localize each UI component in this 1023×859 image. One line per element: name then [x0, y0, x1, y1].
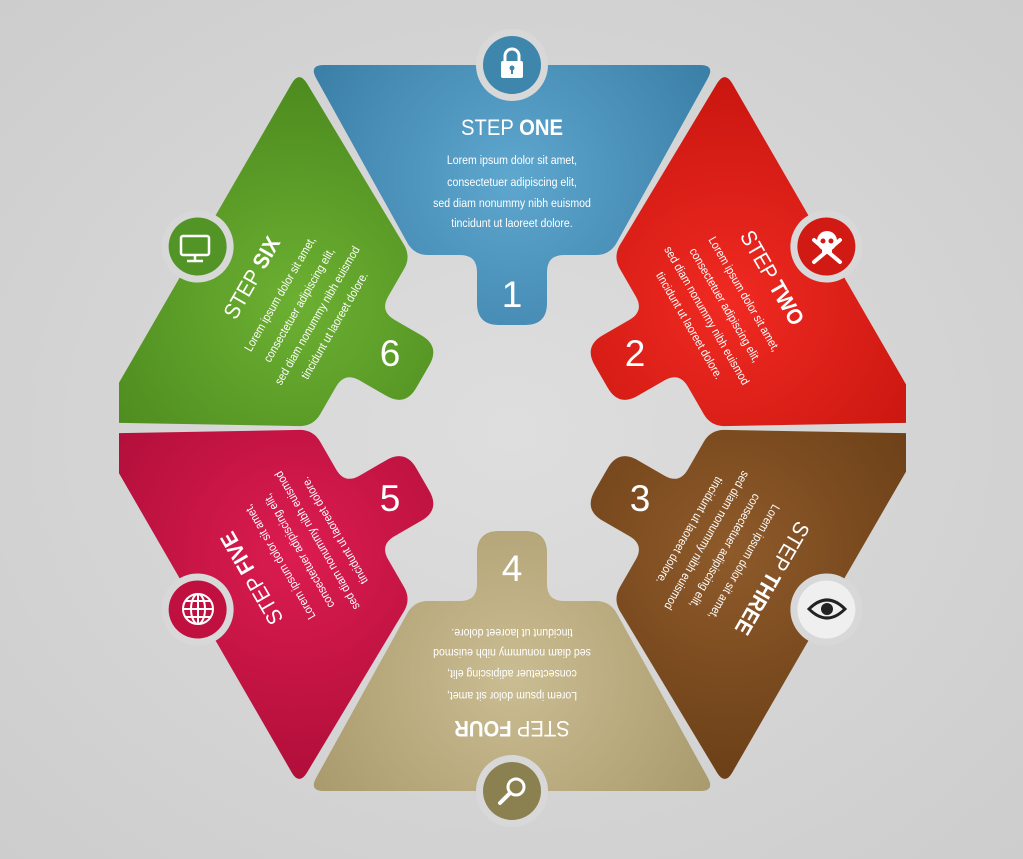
panel: step five: STEP FIVE — [216, 527, 289, 628]
numbers: 2 — [625, 333, 645, 374]
panel: step six: Lorem ipsum dolor sit amet, — [243, 235, 319, 354]
panel: step four: consectetuer adipiscing elit, — [447, 667, 577, 680]
panel: step three — [590, 430, 906, 779]
panel: step three: consectetuer adipiscing elit, — [686, 491, 762, 610]
panel: step two: tincidunt ut laoreet dolore. — [653, 270, 725, 382]
panel: step four: sed diam nonummy nibh euismod — [433, 646, 591, 659]
panel: step one: Lorem ipsum dolor sit amet, — [447, 154, 577, 167]
numbers — [380, 274, 650, 589]
panel: step three: tincidunt ut laoreet dolore. — [653, 474, 725, 586]
panel: step two: STEP TWO — [735, 227, 808, 330]
panel: step three: Lorem ipsum dolor sit amet, — [705, 502, 781, 621]
panel: step four — [314, 531, 710, 827]
panel: step two — [590, 77, 906, 426]
icon: lock — [501, 49, 523, 78]
panel: step six: tincidunt ut laoreet dolore. — [299, 270, 371, 382]
numbers: 6 — [380, 333, 400, 374]
numbers: 5 — [380, 478, 400, 519]
icon: skull — [814, 231, 840, 262]
panel: step one: sed diam nonummy nibh euismod — [433, 197, 591, 210]
icon: magnifier — [500, 779, 524, 803]
panel: step two: sed diam nonummy nibh euismod — [661, 244, 751, 387]
icon: eye — [809, 600, 845, 618]
panel: step four: tincidunt ut laoreet dolore. — [451, 626, 573, 639]
panel: step two: consectetuer adipiscing elit, — [686, 246, 762, 365]
icon: monitor — [181, 236, 209, 261]
panel: step six: consectetuer adipiscing elit, — [262, 246, 338, 365]
panel: step five: Lorem ipsum dolor sit amet, — [243, 502, 319, 621]
panel: step six: STEP SIX — [219, 233, 285, 323]
panel: step one: tincidunt ut laoreet dolore. — [451, 217, 573, 230]
panel: step five: consectetuer adipiscing elit, — [262, 491, 338, 610]
panel: step five: tincidunt ut laoreet dolore. — [299, 474, 371, 586]
panel: step one: STEP ONE — [461, 116, 563, 140]
numbers: 1 — [502, 274, 522, 315]
panel: step four: STEP FOUR — [454, 716, 570, 740]
panel: step three: sed diam nonummy nibh euismod — [661, 469, 751, 612]
panel: step three: STEP THREE — [730, 517, 814, 639]
panel: step two: Lorem ipsum dolor sit amet, — [705, 235, 781, 354]
numbers: 4 — [502, 548, 522, 589]
panel: step four: Lorem ipsum dolor sit amet, — [447, 689, 577, 702]
panel: step one: consectetuer adipiscing elit, — [447, 176, 577, 189]
icon: globe — [183, 594, 213, 624]
panel: step five — [119, 430, 434, 779]
panel: step six — [119, 77, 434, 426]
panel: step five: sed diam nonummy nibh euismod — [273, 469, 363, 612]
panel: step six: sed diam nonummy nibh euismod — [273, 244, 363, 387]
numbers: 3 — [630, 478, 650, 519]
panel: step one — [314, 29, 710, 325]
